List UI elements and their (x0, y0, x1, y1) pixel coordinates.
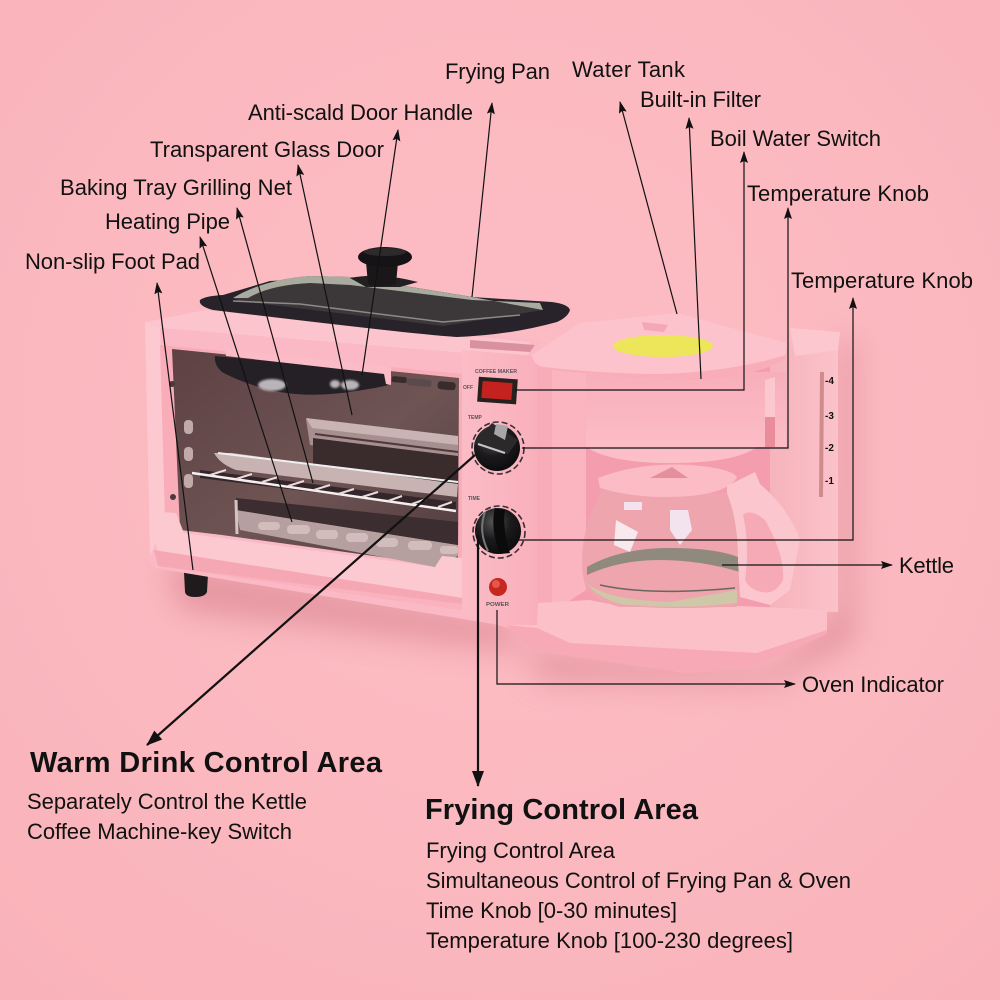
coffee maker switch: OFF (463, 385, 473, 391)
arrow: heating pipe (200, 237, 292, 522)
kettle (582, 465, 800, 607)
arrow: temperature knob lower (505, 298, 853, 540)
oven: lower baking tray (214, 453, 458, 497)
arrow: boil water switch (515, 152, 744, 390)
time knob: TIME (468, 496, 481, 502)
kettle lid (598, 465, 737, 497)
oven: heating pipe (236, 510, 458, 567)
recess (552, 350, 780, 612)
coffee base (507, 600, 827, 673)
oven: door inner frame (160, 345, 463, 562)
kettle handle (727, 472, 800, 605)
oven: foot (184, 572, 208, 597)
text: frying details: Temperature Knob [100-230 degrees] (426, 928, 793, 953)
arrow: frying control area (477, 535, 479, 786)
time knob (468, 496, 525, 558)
label: frying pan: Frying Pan (445, 59, 550, 84)
arrow: temperature knob upper (522, 208, 788, 448)
coffee section: -2 (825, 443, 834, 454)
label: door handle: Anti-scald Door Handle (248, 100, 473, 125)
oven: side wall bumps (184, 420, 193, 488)
text: frying details: Time Knob [0-30 minutes] (426, 898, 677, 923)
oven: glass window (172, 349, 459, 567)
arrow: glass door (298, 165, 352, 415)
pan lid (233, 276, 543, 326)
arrow: door handle (362, 130, 398, 375)
oven: door bottom panel (156, 512, 463, 598)
oven: screws (169, 381, 176, 500)
arrow: baking tray (237, 208, 313, 483)
block: warm drink control area (27, 747, 383, 844)
frying pan (200, 247, 570, 337)
coffee maker switch (463, 369, 518, 404)
arrow: warm drink control area (147, 455, 475, 745)
top sticker (470, 340, 535, 352)
temperature knob: TEMP (468, 415, 483, 421)
coffee section: -4 (825, 376, 834, 387)
pan base (200, 277, 570, 337)
water reservoir (770, 332, 838, 612)
heading: warm drink: Warm Drink Control Area (30, 747, 383, 779)
label: temperature knob upper: Temperature Knob (747, 181, 929, 206)
tank label (613, 335, 713, 357)
power indicator (486, 578, 509, 608)
label: foot pad: Non-slip Foot Pad (25, 249, 200, 274)
label: baking tray: Baking Tray Grilling Net (60, 175, 292, 200)
coffee section: -1 (825, 476, 834, 487)
coffee section: -3 (825, 411, 834, 422)
label: glass door: Transparent Glass Door (150, 137, 384, 162)
coffee maker switch: COFFEE MAKER (475, 369, 517, 375)
oven: door handle (215, 356, 388, 395)
filter pot (586, 372, 786, 463)
text: frying details (426, 838, 851, 953)
water tank lid (532, 313, 787, 380)
arrow: built-in filter (689, 118, 701, 379)
text: frying details: Frying Control Area (426, 838, 616, 863)
heading: frying: Frying Control Area (425, 794, 699, 826)
text: warm drink details: Separately Control the Kettle (27, 789, 307, 814)
floor shadow (165, 340, 855, 685)
temperature knob (468, 415, 524, 474)
label: oven indicator: Oven Indicator (802, 672, 944, 697)
oven: body frame (145, 306, 540, 628)
arrow: frying pan (472, 103, 492, 297)
control panel (462, 350, 537, 630)
power indicator: POWER (486, 602, 509, 608)
arrow: kettle (722, 564, 892, 566)
label: built-in filter: Built-in Filter (640, 87, 761, 112)
block: frying control area (425, 794, 851, 953)
appliance: breakfast machine (145, 247, 855, 685)
label: kettle: Kettle (899, 553, 954, 578)
label: temperature knob lower: Temperature Knob (791, 268, 973, 293)
arrow: water tank (620, 102, 677, 314)
text: warm drink details (27, 789, 307, 844)
text: frying details: Simultaneous Control of Frying Pan & Oven (426, 868, 851, 893)
arrow: oven indicator (497, 610, 795, 684)
kettle glass (582, 490, 740, 607)
oven: upper baking tray (306, 419, 458, 463)
oven: vents (391, 376, 456, 391)
label: heating pipe: Heating Pipe (105, 209, 230, 234)
label: water tank: Water Tank (572, 57, 686, 82)
pan knob (350, 276, 418, 287)
text: warm drink details: Coffee Machine-key Switch (27, 819, 292, 844)
oven: grilling rack (200, 470, 456, 510)
label: boil water switch: Boil Water Switch (710, 126, 881, 151)
leader arrows (147, 102, 892, 786)
coffee section (532, 313, 840, 612)
arrow: foot pad (157, 283, 193, 570)
